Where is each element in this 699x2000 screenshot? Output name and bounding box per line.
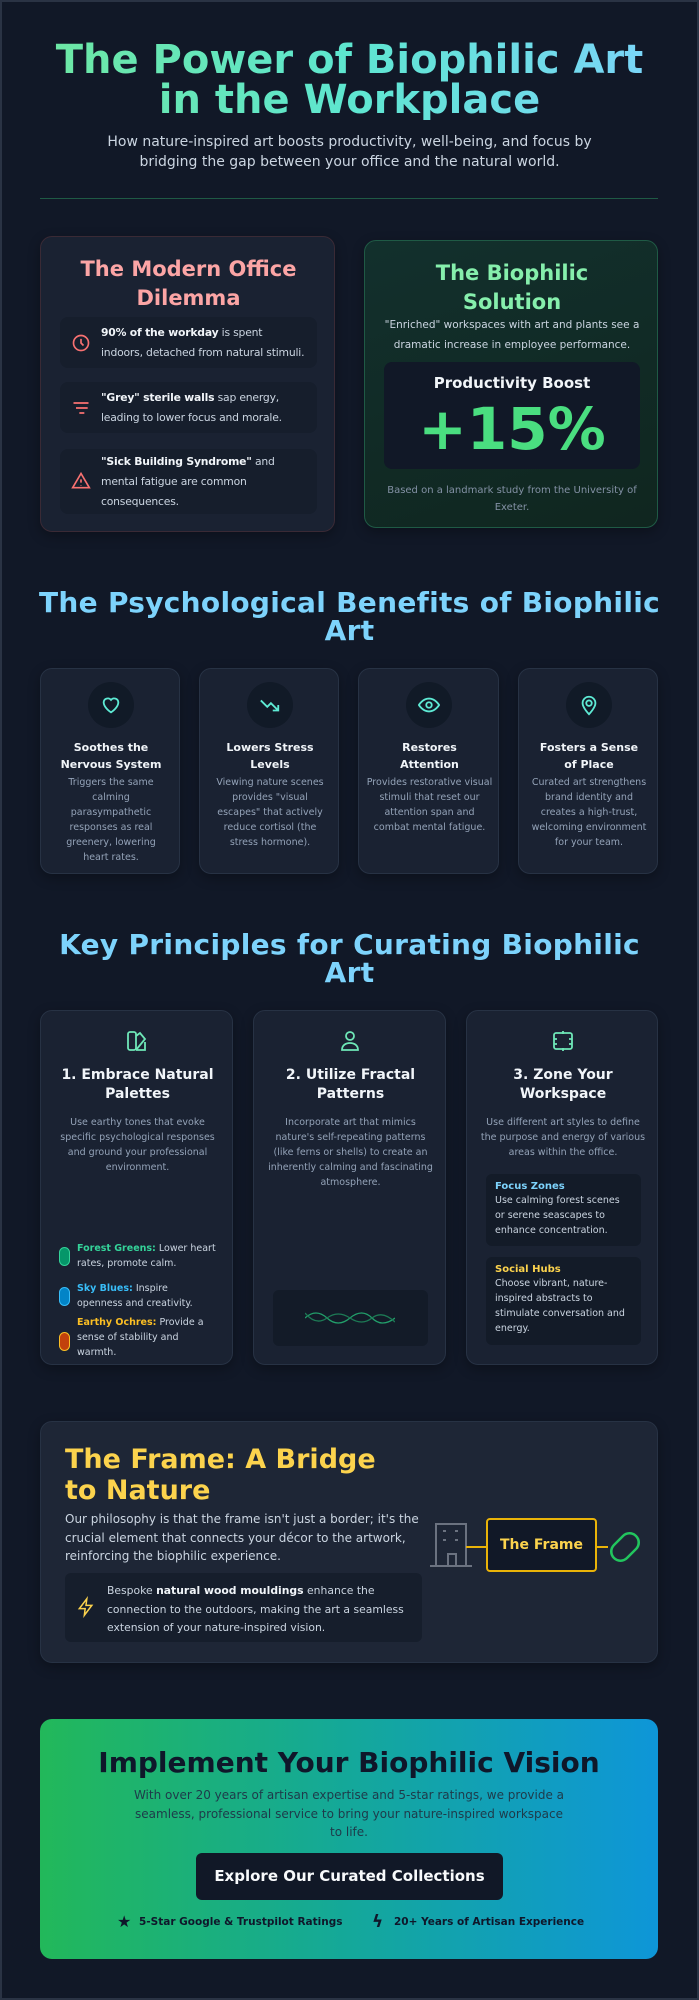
panel: modern office dilemma: [40, 236, 335, 532]
icon: heart: [88, 682, 134, 728]
card: palettes: [40, 1010, 233, 1365]
icon: clock: [72, 334, 90, 352]
card: palettes: Use earthy tones that evoke specific psychological responses and ground your professional environment.: [60, 1117, 215, 1173]
swatch list: [59, 1243, 216, 1358]
card: soothes: Triggers the same calming parasympathetic responses as real greenery, lowering heart rates.: [66, 777, 156, 863]
card: attention: Provides restorative visual stimuli that reset our attention span and combat mental fatigue.: [367, 777, 492, 833]
panel: biophilic solution: [364, 240, 658, 528]
heading: key principles: Key Principles for Curating Biophilic: [59, 928, 640, 961]
heading: frame: to Nature: [65, 1475, 210, 1506]
diagram: building to frame to link: The Frame: [500, 1537, 583, 1553]
heading: solution: Solution: [463, 290, 561, 314]
card: fractal: Patterns: [317, 1086, 384, 1102]
zone: focus: Focus Zones: [495, 1181, 565, 1192]
title: The Power of Biophilic Art: [56, 37, 643, 83]
callout: mouldings: [65, 1573, 422, 1642]
panel: the frame: [40, 1421, 658, 1663]
heading: key principles: [59, 928, 640, 989]
icon: palette: [127, 1031, 146, 1051]
heading: frame: The Frame: A Bridge: [65, 1444, 376, 1475]
zone: social: Social Hubs: [495, 1264, 561, 1275]
heading: solution: The Biophilic: [436, 261, 588, 285]
card: place: Curated art strengthens brand identity and creates a high-trust, welcoming environment for your team.: [532, 777, 646, 848]
card: soothes: Nervous System: [61, 758, 161, 771]
text: enriched: "Enriched" workspaces with art and plants see a dramatic increase in employee performance.: [385, 319, 639, 351]
heading: implement: Implement Your Biophilic Vision: [98, 1746, 600, 1779]
item: workday: indoors, detached from natural stimuli.: [101, 346, 304, 359]
card: zones: [466, 1010, 658, 1365]
item: grey walls: [60, 382, 317, 433]
zone: social: [486, 1257, 641, 1345]
icon: trend down: [247, 682, 293, 728]
callout: mouldings: Bespoke natural wood mouldings enhance the connection to the outdoors, making the art a seamless extension of your nature-inspired vision.: [107, 1584, 404, 1634]
item: workday: [60, 317, 317, 368]
heading: psychological benefits: [39, 586, 660, 647]
heading: dilemma: Dilemma: [136, 286, 240, 310]
icon: zone: [553, 1031, 573, 1051]
icon: eye: [406, 682, 452, 728]
card: stress: Lowers Stress: [226, 741, 314, 754]
card: zones: Use different art styles to define the purpose and energy of various areas within the office.: [481, 1117, 645, 1158]
swatch list: Sky Blues: Inspire openness and creativity.: [77, 1283, 193, 1309]
icon: lines: [74, 402, 88, 414]
card: zones: Workspace: [520, 1086, 606, 1102]
badges: [117, 1912, 584, 1932]
card: stress: Levels: [250, 758, 290, 771]
card: place: of Place: [564, 758, 614, 771]
icon: warning: [71, 472, 91, 488]
card: fractal: [253, 1010, 446, 1365]
badges: 20+ Years of Artisan Experience: [394, 1916, 584, 1928]
button: [196, 1853, 503, 1900]
wave graphic: [273, 1290, 428, 1346]
stat box: +15%: [418, 395, 606, 463]
heading: key principles: Art: [325, 956, 374, 989]
source note: Based on a landmark study from the University of Exeter.: [387, 485, 637, 513]
card: place: Fosters a Sense: [540, 741, 638, 754]
diagram: building to frame to link: [430, 1518, 640, 1572]
item: sick building: "Sick Building Syndrome" and mental fatigue are common consequences.: [101, 455, 275, 508]
zone: focus: Use calming forest scenes or serene seascapes to enhance concentration.: [495, 1195, 620, 1236]
card: fractal: 2. Utilize Fractal: [286, 1067, 415, 1083]
button: Explore Our Curated Collections: [214, 1867, 485, 1885]
item: workday: 90% of the workday is spent: [101, 326, 262, 339]
heading: dilemma: [80, 257, 296, 310]
card: palettes: 1. Embrace Natural: [61, 1067, 214, 1083]
card: soothes: Soothes the: [74, 741, 148, 754]
heading: dilemma: The Modern Office: [80, 257, 296, 281]
badges: ★: [117, 1912, 131, 1931]
icon: pin: [566, 682, 612, 728]
card: attention: [358, 668, 499, 874]
icon: person: [341, 1031, 359, 1051]
zone: social: Choose vibrant, nature-inspired abstracts to stimulate conversation and energy.: [495, 1278, 625, 1334]
card: fractal: Incorporate art that mimics nature's self-repeating patterns (like ferns or shells) to create an inherently calming and fascinating atmosphere.: [268, 1117, 433, 1188]
icon: bolt: [78, 1596, 94, 1618]
heading: psychological benefits: Art: [325, 614, 374, 647]
card: stress: Viewing nature scenes provides "visual escapes" that actively reduce cortisol (the stress hormone).: [216, 777, 324, 848]
card: stress: [199, 668, 339, 874]
text: cta: With over 20 years of artisan expertise and 5-star ratings, we provide a seamless, professional service to bring your nature-inspired workspace to life.: [134, 1788, 564, 1839]
stat box: Productivity Boost: [434, 374, 590, 392]
zone: focus: [486, 1174, 641, 1246]
card: attention: Restores: [402, 741, 457, 754]
title: [20, 40, 679, 120]
swatch list: Forest Greens: Lower heart rates, promote calm.: [77, 1243, 216, 1269]
heading: psychological benefits: The Psychological Benefits of Biophilic: [39, 586, 660, 619]
title: in the Workplace: [159, 77, 540, 123]
text: philosophy: Our philosophy is that the frame isn't just a border; it's the crucial element that connects your décor to the artwork, reinforcing the biophilic experience.: [65, 1512, 419, 1563]
card: attention: Attention: [400, 758, 459, 771]
stat box: [384, 362, 640, 469]
card: soothes: [40, 668, 180, 874]
swatch list: Earthy Ochres: Provide a sense of stability and warmth.: [77, 1317, 204, 1358]
panel: call to action: [40, 1719, 658, 1959]
subtitle: How nature-inspired art boosts productivity, well-being, and focus by bridging the gap between your office and the natural world.: [107, 134, 592, 170]
item: sick building: [60, 449, 317, 514]
card: zones: 3. Zone Your: [513, 1067, 613, 1083]
heading: solution: [436, 261, 588, 314]
item: grey walls: "Grey" sterile walls sap energy, leading to lower focus and morale.: [101, 391, 282, 424]
heading: frame: [65, 1444, 376, 1506]
card: place: [518, 668, 658, 874]
badges: 5-Star Google & Trustpilot Ratings: [139, 1916, 342, 1928]
badges: ϟ: [372, 1912, 383, 1932]
card: palettes: Palettes: [105, 1086, 170, 1102]
